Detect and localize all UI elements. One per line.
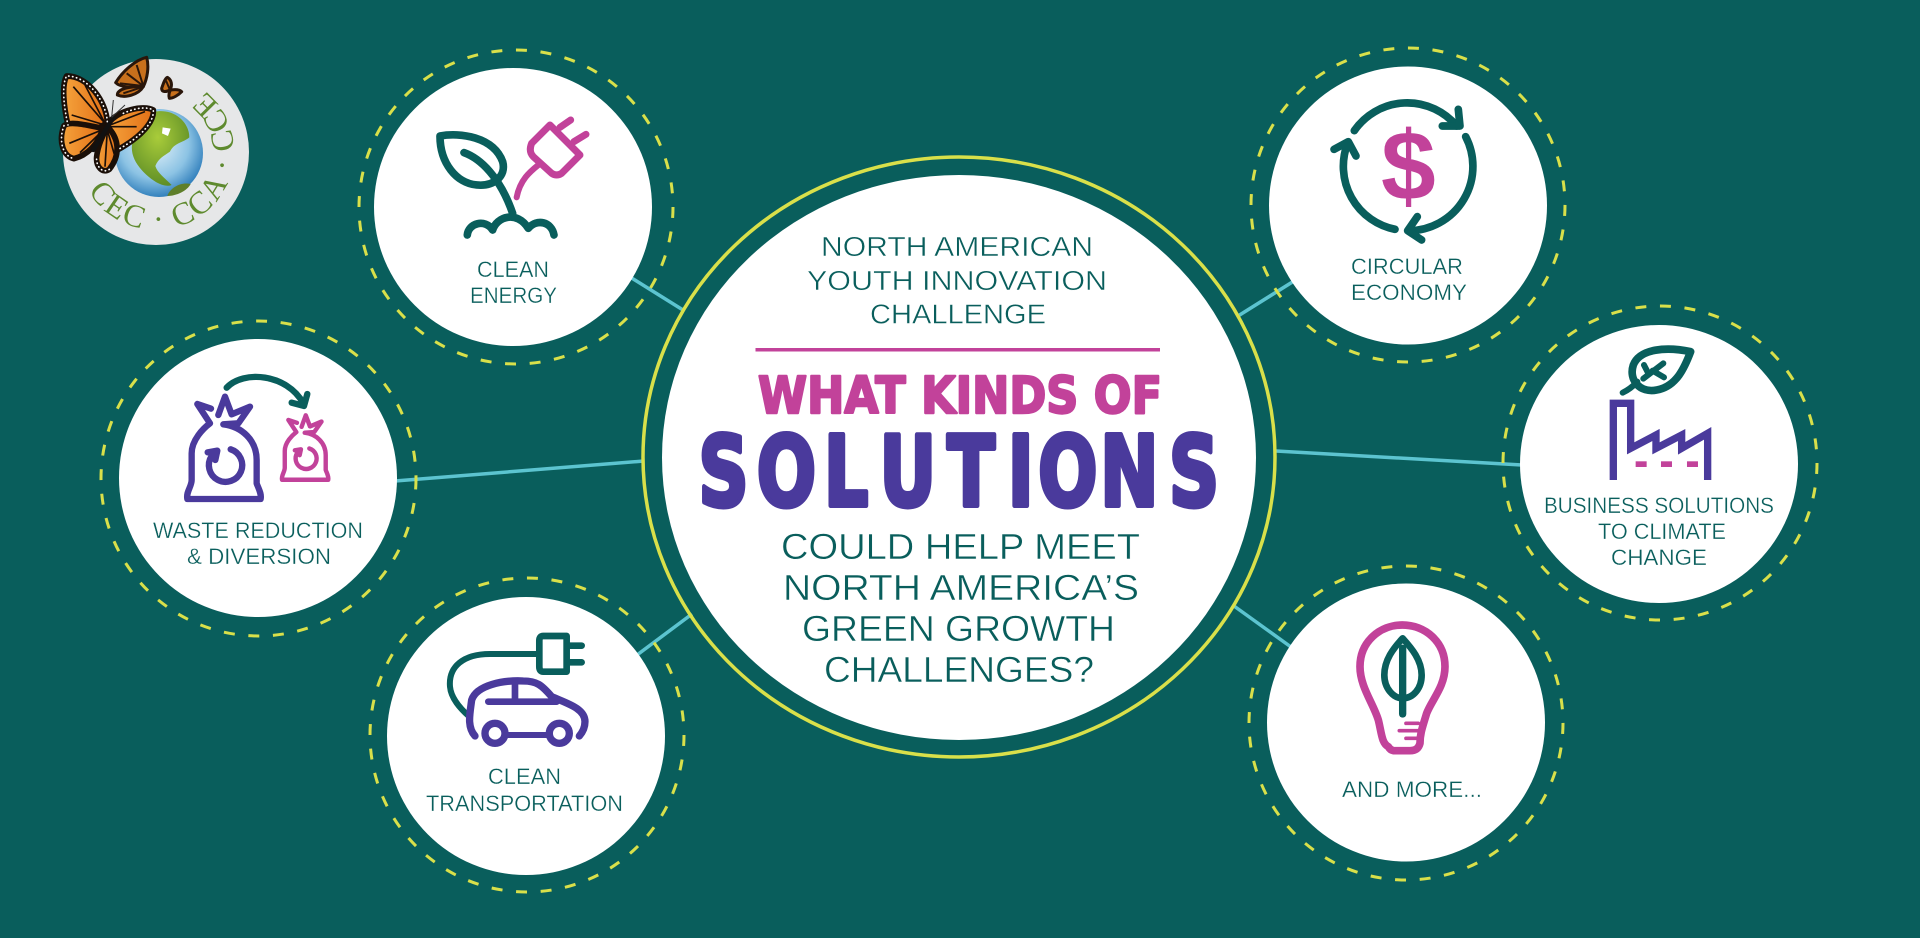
connector: and more: [1234, 606, 1291, 647]
question text: COULD HELP MEET: [781, 526, 1140, 567]
label: CHANGE: [1611, 545, 1707, 570]
icon: circular dollar: $: [1381, 110, 1436, 220]
question text: [781, 526, 1140, 690]
panel: circular economy: [1251, 48, 1565, 362]
challenge name: CHALLENGE: [870, 298, 1046, 330]
challenge name: YOUTH INNOVATION: [807, 265, 1107, 296]
label: CLEAN: [477, 257, 549, 282]
panel: clean energy: [359, 50, 673, 364]
label: TO CLIMATE: [1598, 519, 1726, 544]
connector: clean transportation: [637, 614, 692, 655]
divider rule: [756, 348, 1160, 352]
icon: circular dollar: [1334, 103, 1473, 240]
dashed ring: [370, 578, 684, 892]
label: TRANSPORTATION: [426, 791, 623, 816]
label: BUSINESS SOLUTIONS: [1544, 493, 1774, 518]
challenge name: [807, 231, 1107, 330]
label: CLEAN: [488, 764, 561, 789]
white disc: [374, 68, 652, 346]
icon: monarch butterflies: [61, 57, 182, 171]
panel: central question: [643, 157, 1275, 757]
logo disc: [63, 59, 249, 245]
label: [1351, 254, 1467, 305]
icon: factory and leaf: [1613, 349, 1708, 480]
logo circular text: CEC · CCA · CCE: [92, 92, 234, 228]
icon: recycling bags with arrow: [187, 377, 328, 499]
panel: and more: [1249, 566, 1563, 880]
icon: seedling and plug: [440, 120, 586, 235]
panel: business solutions to climate change: [1503, 306, 1817, 620]
connector: circular economy: [1238, 281, 1294, 316]
yellow ring: [643, 157, 1275, 757]
connector: clean energy: [630, 277, 683, 310]
label: CIRCULAR: [1351, 254, 1463, 279]
dashed ring: [359, 50, 673, 364]
connector: business solutions: [1276, 451, 1522, 465]
question text: CHALLENGES?: [824, 649, 1094, 690]
white disc: [1520, 325, 1798, 603]
label: [153, 518, 363, 569]
label: [470, 257, 557, 308]
label: & DIVERSION: [187, 544, 331, 569]
panel: clean transportation: [370, 578, 684, 892]
label: [426, 764, 623, 816]
white disc: [1267, 584, 1545, 862]
white disc: [1269, 66, 1547, 344]
logo globe: [115, 109, 203, 197]
dashed ring: [1249, 566, 1563, 880]
label: ENERGY: [470, 283, 557, 308]
icon: light bulb with leaf: [1360, 625, 1445, 751]
challenge name: NORTH AMERICAN: [821, 231, 1093, 262]
icon: electric car: [450, 636, 585, 743]
heading: solutions: SOLUTIONS: [698, 416, 1219, 528]
heading: what kinds of: WHAT KINDS OF: [758, 367, 1162, 426]
label: AND MORE...: [1342, 777, 1482, 802]
connector: waste reduction: [395, 461, 644, 481]
white disc: [119, 339, 397, 617]
logo: CEC CCA CCE: [58, 56, 249, 245]
white disc: [387, 597, 665, 875]
label: ECONOMY: [1351, 280, 1467, 305]
dashed ring: [101, 321, 416, 636]
label: WASTE REDUCTION: [153, 518, 363, 543]
dashed ring: [1503, 306, 1817, 620]
white disc: [662, 175, 1256, 740]
question text: GREEN GROWTH: [802, 608, 1115, 649]
question text: NORTH AMERICA’S: [783, 567, 1139, 608]
dashed ring: [1251, 48, 1565, 362]
label: [1544, 493, 1774, 570]
panel: waste reduction and diversion: [101, 321, 416, 636]
